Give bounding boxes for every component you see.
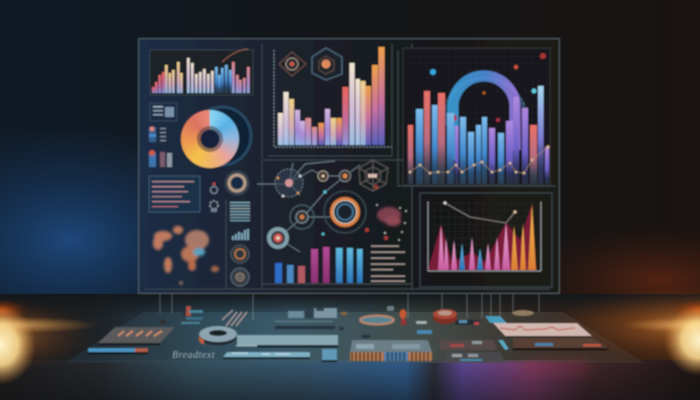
network diagram bbox=[257, 160, 407, 252]
mini bar group two bbox=[149, 150, 172, 167]
panel frame bbox=[138, 38, 560, 294]
slab: chart bbox=[223, 352, 310, 359]
connector lines bbox=[160, 294, 539, 320]
bars bbox=[408, 86, 549, 184]
slab: blue grey bbox=[350, 340, 432, 352]
bottom bar chart bbox=[262, 247, 412, 284]
right light glow bbox=[550, 285, 700, 376]
dark red slab bbox=[513, 338, 608, 350]
red cluster bbox=[377, 207, 401, 226]
bottom right area chart bbox=[428, 202, 541, 271]
disc bbox=[199, 326, 237, 345]
top centre bar chart bbox=[274, 47, 392, 147]
white chart slab bbox=[493, 323, 592, 338]
hub node bbox=[275, 169, 303, 197]
stripe panel bbox=[230, 202, 250, 221]
slab: tan chart bbox=[98, 327, 175, 345]
icon: target node bbox=[279, 52, 306, 76]
left light glow bbox=[0, 297, 100, 385]
small ring nodes bbox=[318, 170, 350, 236]
donut chart bbox=[181, 107, 252, 168]
cyan block bbox=[498, 340, 509, 350]
grey slab bottom bbox=[445, 352, 505, 362]
ring on floor bbox=[360, 316, 394, 324]
pill bbox=[455, 320, 480, 325]
frame dividers bbox=[145, 44, 556, 290]
small slab bbox=[322, 349, 337, 362]
radial ring bbox=[430, 53, 546, 160]
pink stripes bbox=[222, 310, 247, 326]
floor objects left bbox=[88, 306, 347, 362]
large ring node bbox=[324, 191, 366, 233]
top left bar chart bbox=[150, 49, 253, 95]
icon: hexagon node bbox=[312, 48, 342, 80]
small dials bbox=[231, 245, 249, 286]
web hexagon bbox=[359, 160, 388, 191]
ring node bbox=[290, 205, 314, 229]
floor bbox=[0, 294, 700, 400]
italic caption: Breadtext bbox=[172, 350, 215, 361]
small tile bbox=[512, 310, 534, 316]
grey slab top bbox=[438, 340, 497, 350]
floor objects right bbox=[350, 305, 608, 362]
small icons bbox=[210, 182, 218, 212]
text lines bbox=[371, 246, 405, 282]
slab: dark bar bbox=[275, 326, 335, 329]
ring gauge bbox=[224, 170, 250, 196]
red ring node bbox=[267, 227, 289, 249]
cyan tile bbox=[485, 316, 507, 323]
small data table bbox=[150, 103, 177, 121]
mini histogram bbox=[232, 229, 249, 240]
tokens bbox=[362, 305, 432, 338]
dotted line bbox=[409, 146, 550, 174]
mini bar group one bbox=[149, 126, 166, 142]
blocks bbox=[275, 308, 347, 330]
barcode stripes bbox=[350, 352, 432, 361]
cluster dots bbox=[365, 204, 407, 241]
strip: blue gauge bbox=[88, 348, 148, 354]
ring stack bbox=[433, 309, 457, 324]
floor reflection: magenta slab glow bbox=[520, 360, 590, 374]
horizontal bar list bbox=[149, 176, 200, 212]
network links bbox=[257, 161, 360, 252]
dashboard panel bbox=[138, 38, 560, 294]
slab: long bbox=[236, 335, 338, 348]
top right chart bbox=[403, 48, 550, 185]
world map bbox=[153, 226, 219, 284]
stacked tokens bbox=[160, 306, 203, 324]
